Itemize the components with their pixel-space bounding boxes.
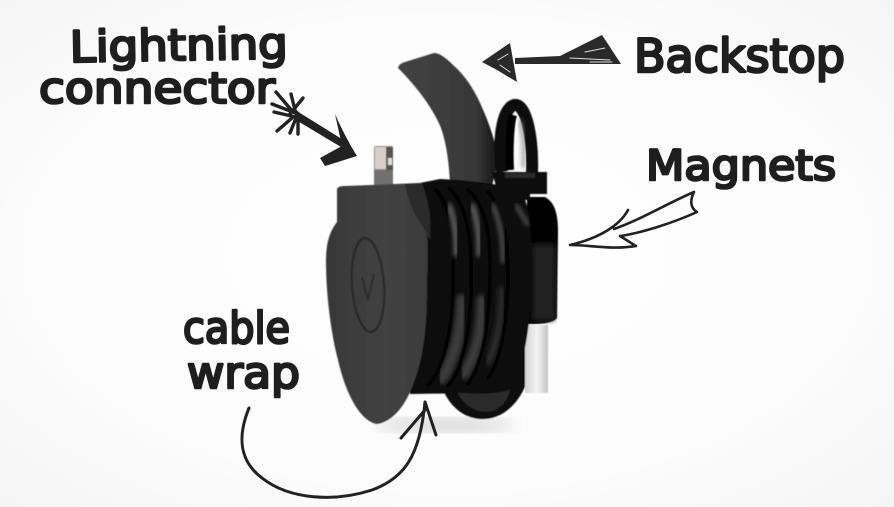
label: Backstop: Backstop [634, 29, 845, 83]
product: cable wrap [326, 53, 558, 432]
label: Magnets: Magnets [646, 141, 836, 190]
backstop [398, 53, 498, 186]
clip [492, 172, 547, 200]
arrow: Magnets [570, 192, 697, 248]
arrow: Backstop [482, 35, 621, 82]
coil rings [428, 188, 528, 386]
label: Lightning connector: Lightning [69, 19, 288, 73]
arrow: cable wrap [242, 402, 436, 497]
back disc [441, 330, 528, 419]
rear loop [500, 105, 532, 172]
label: cable wrap: wrap [187, 348, 300, 399]
lightning connector [374, 146, 393, 186]
ground shadow [375, 418, 515, 432]
arrow: Lightning connector [272, 92, 357, 166]
label: Lightning connector [39, 19, 288, 114]
label: Lightning connector: connector [39, 64, 275, 114]
embossed logo [349, 237, 387, 333]
magnet housing [527, 197, 558, 324]
coil body [410, 179, 532, 394]
front plate [326, 183, 428, 424]
lower metal connector [525, 325, 548, 393]
label: cable wrap [183, 303, 300, 399]
label: cable wrap: cable [183, 303, 290, 354]
